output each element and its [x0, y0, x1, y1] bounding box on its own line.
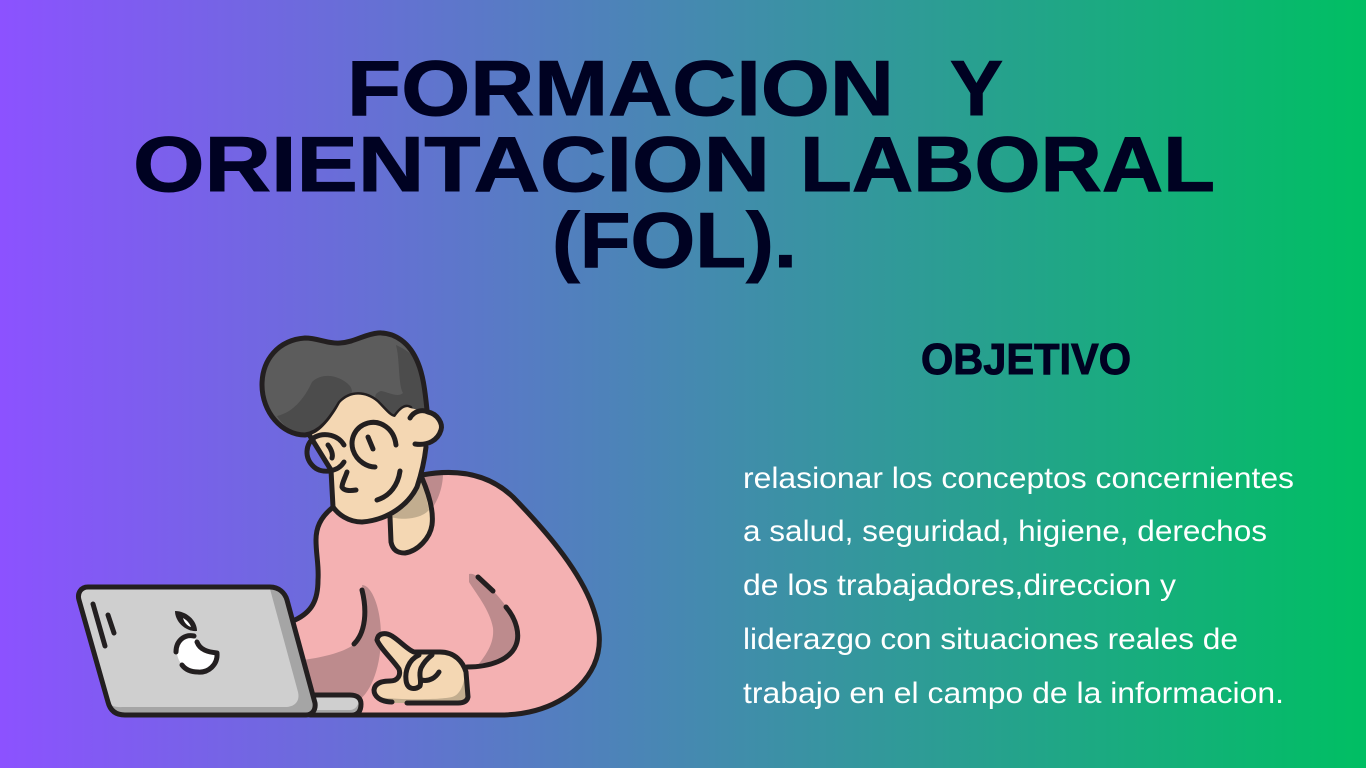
laptop lid	[78, 587, 315, 715]
text block: objetivo description: relasionar los conceptos concernientes	[743, 462, 1294, 495]
text block: objetivo description: liderazgo con situaciones reales de	[743, 623, 1238, 656]
title	[133, 44, 1215, 284]
heading: objetivo: OBJETIVO	[921, 335, 1131, 384]
apple logo	[175, 611, 217, 672]
title: FORMACION	[347, 44, 894, 132]
face details	[328, 437, 400, 500]
text block: objetivo description: a salud, seguridad, higiene, derechos	[743, 515, 1267, 548]
title: (FOL).	[552, 196, 797, 284]
text block: objetivo description	[743, 462, 1294, 710]
title: LABORAL	[800, 120, 1215, 208]
text block: objetivo description: trabajo en el campo de la informacion.	[743, 677, 1284, 710]
glasses	[307, 422, 396, 471]
title: ORIENTACION	[133, 120, 770, 208]
hand	[374, 634, 468, 703]
laptop base	[310, 695, 361, 715]
body: pink sweater	[295, 472, 599, 715]
laptop	[78, 587, 361, 715]
face	[310, 395, 442, 522]
title: Y	[950, 44, 1003, 132]
neck	[390, 478, 432, 553]
text block: objetivo description: de los trabajadores,direccion y	[743, 569, 1176, 602]
hair	[262, 333, 427, 435]
illustration: person working at laptop	[78, 333, 599, 715]
